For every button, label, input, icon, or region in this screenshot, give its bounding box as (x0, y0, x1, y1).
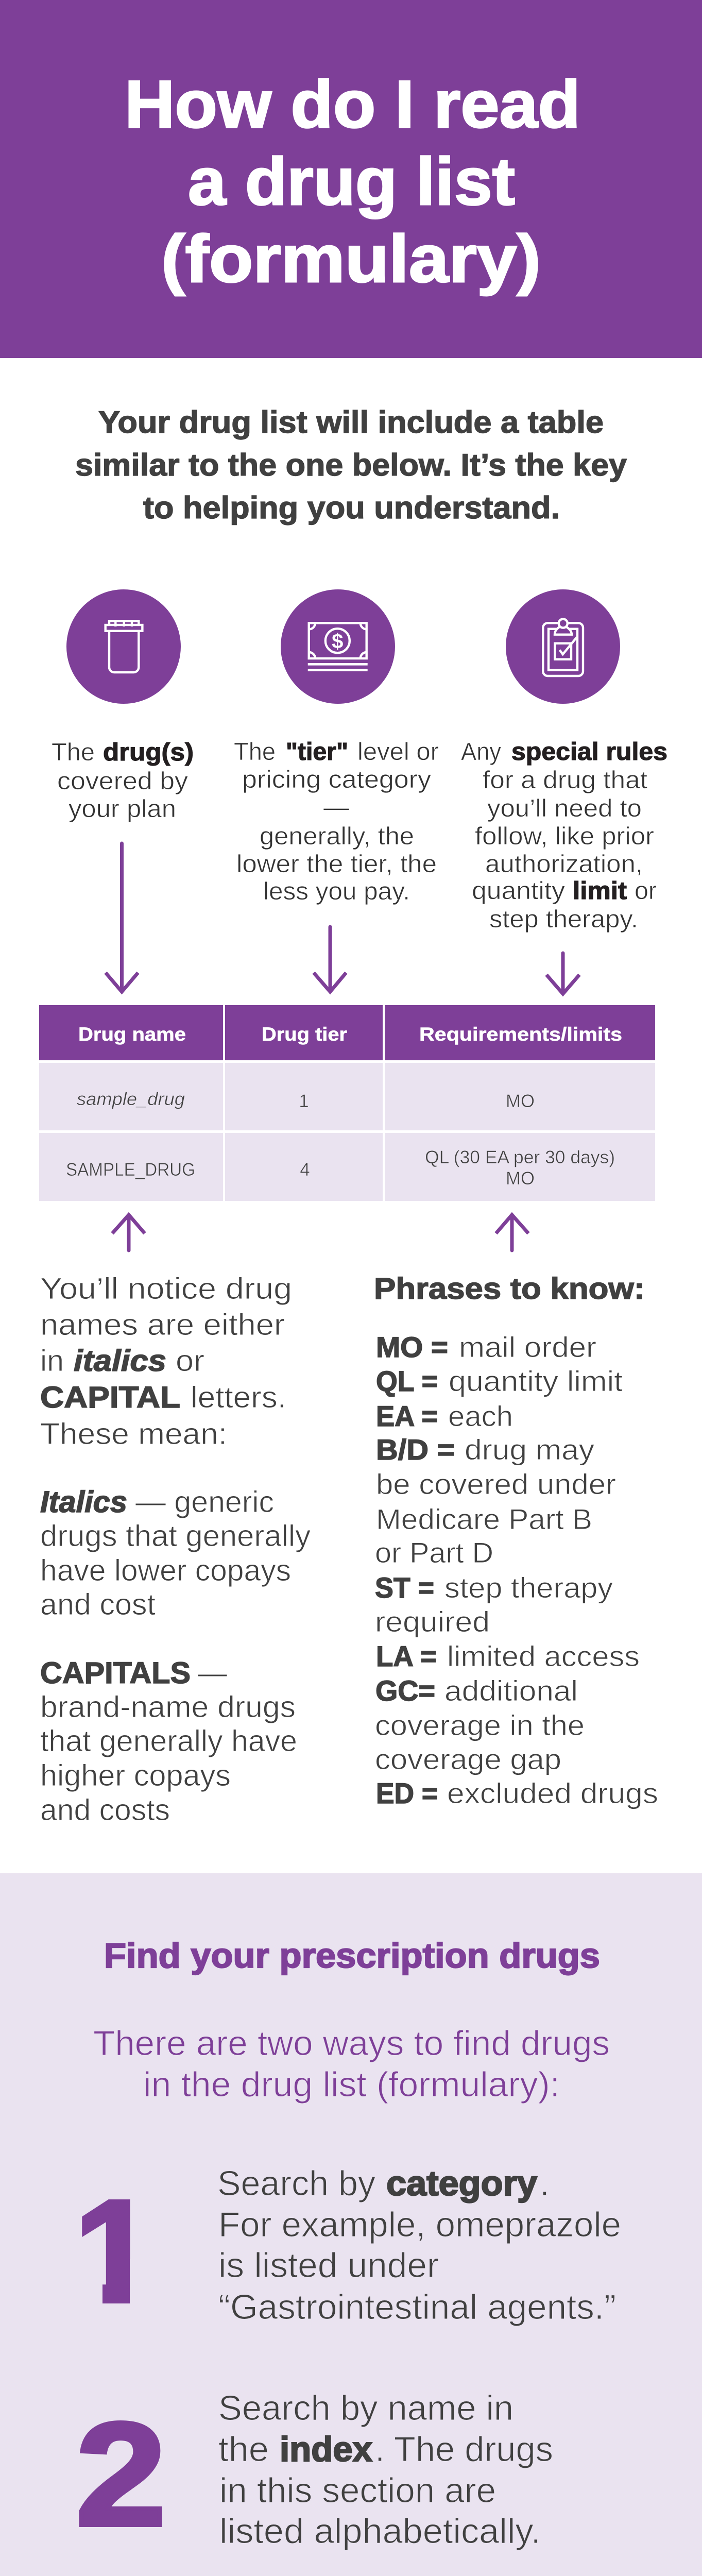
caption: special rules: limit (573, 877, 627, 905)
caption: tier level: "tier" (286, 738, 348, 766)
step 1 text: “Gastrointestinal agents.” (218, 2287, 616, 2327)
table row: brand sample: 4 (300, 1160, 310, 1180)
table header row (39, 1005, 655, 1060)
number 2: 2 (76, 2393, 166, 2556)
step 2 text: Search by name in (218, 2388, 513, 2428)
text block: phrases glossary: Medicare Part B (376, 1503, 592, 1535)
caption: special rules: step therapy. (489, 906, 638, 933)
text block: phrases glossary: drug may (465, 1433, 594, 1466)
table row: brand sample: MO (506, 1168, 535, 1189)
subheading: two ways (93, 2024, 610, 2104)
title: (formulary) (161, 221, 541, 296)
text block: phrases glossary: coverage in the (375, 1709, 585, 1741)
caption: special rules (461, 738, 667, 933)
intro text: to helping you understand. (143, 490, 560, 525)
text block: drug name styles: have lower copays (40, 1554, 291, 1587)
text block: phrases glossary: EA = (376, 1400, 438, 1432)
step 1 text: category (386, 2164, 537, 2203)
text block: phrases glossary: MO = (376, 1331, 448, 1363)
caption: tier level: generally, the (260, 823, 414, 850)
step 1 text: . (540, 2164, 550, 2203)
arrow: to requirements (546, 953, 579, 994)
icon: dollar bill: $ (332, 630, 343, 653)
text block: phrases glossary: ST = (375, 1571, 434, 1604)
text block: phrases glossary: coverage gap (375, 1743, 561, 1775)
text block: drug name styles: and costs (40, 1793, 170, 1827)
text block: drug name styles: that generally have (40, 1724, 297, 1758)
arrow: to drug name (106, 843, 138, 992)
text block: drug name styles: Italics (40, 1485, 127, 1519)
arrow: up to requirements (496, 1215, 528, 1250)
arrow: up to drug names (112, 1215, 145, 1250)
step 1 text: For example, omeprazole (218, 2205, 621, 2244)
text block: phrases glossary: required (375, 1605, 490, 1638)
text block: phrases glossary: LA = (376, 1640, 437, 1672)
number 1: 1 (74, 2170, 155, 2332)
step 2 text: listed alphabetically. (219, 2512, 541, 2551)
caption: special rules: you’ll need to (487, 795, 642, 822)
text block: phrases glossary: QL = (376, 1365, 438, 1397)
text block: drug name styles: brand-name drugs (40, 1690, 296, 1724)
step 2 text: . The drugs (375, 2430, 553, 2469)
table row: brand sample: SAMPLE_DRUG (66, 1160, 195, 1180)
text block: drug name styles: CAPITAL (40, 1381, 180, 1414)
text block: phrases glossary: quantity limit (449, 1365, 623, 1397)
intro text: similar to the one below. It’s the key (75, 448, 627, 482)
caption: drugs covered (52, 739, 194, 823)
table (39, 1005, 655, 1201)
step 2 text: index (280, 2430, 372, 2469)
text block: drug name styles: You’ll notice drug (40, 1272, 292, 1306)
table header row: Requirements/limits (419, 1024, 622, 1045)
text block: drug name styles: names are either (40, 1308, 285, 1342)
caption: special rules: for a drug that (483, 767, 647, 794)
text block: phrases glossary: step therapy (444, 1571, 613, 1604)
caption: drugs covered: The (52, 739, 95, 766)
table row: generic sample: MO (506, 1091, 535, 1111)
text block: phrases glossary: ED = (376, 1777, 438, 1809)
text block: drug name styles: in (40, 1344, 64, 1378)
table header row: Drug tier (262, 1024, 347, 1045)
title: How do I read (125, 66, 580, 142)
arrow: to drug tier (314, 927, 346, 992)
text block: drug name styles: — generic (135, 1485, 274, 1519)
text block: phrases glossary: mail order (459, 1331, 596, 1363)
table row: generic sample (39, 1063, 655, 1130)
intro text: Your drug list will include a table (98, 405, 604, 439)
text block: drug name styles: higher copays (40, 1759, 231, 1792)
text block: phrases glossary: excluded drugs (447, 1777, 658, 1809)
table row: brand sample (39, 1133, 655, 1201)
step 1 text (217, 2164, 621, 2327)
text block: drug name styles: or (176, 1344, 204, 1378)
text block: drug name styles: and cost (40, 1588, 156, 1621)
step 2 text (218, 2388, 553, 2551)
caption: tier level: pricing category (242, 766, 431, 793)
text block: phrases glossary: B/D = (376, 1433, 455, 1466)
text block: drug name styles: These mean: (40, 1417, 227, 1451)
step 2 text: the (218, 2430, 269, 2469)
table row: generic sample: sample_drug (77, 1089, 185, 1109)
panel: header banner (0, 0, 702, 358)
text block: phrases glossary: additional (444, 1674, 578, 1707)
heading: phrases to know: Phrases to know: (374, 1272, 645, 1306)
caption: tier level: level or (357, 738, 439, 766)
table row: brand sample: QL (30 EA per 30 days) (425, 1147, 615, 1167)
text block: phrases glossary: limited access (447, 1640, 640, 1672)
text block: drug name styles (40, 1272, 311, 1827)
title (125, 66, 580, 296)
text block: drug name styles: drugs that generally (40, 1519, 311, 1553)
caption: tier level (234, 738, 439, 905)
caption: special rules: follow, like prior (475, 823, 654, 850)
caption: special rules: authorization, (485, 851, 643, 878)
caption: special rules: special rules (511, 738, 667, 766)
caption: tier level: The (234, 738, 276, 766)
table header row: Drug name (78, 1024, 186, 1045)
text block: drug name styles: italics (74, 1344, 166, 1378)
caption: drugs covered: covered by (57, 768, 188, 795)
text block: phrases glossary (375, 1331, 658, 1809)
text block: phrases glossary: or Part D (375, 1536, 493, 1569)
text block: phrases glossary: be covered under (376, 1468, 616, 1500)
caption: drugs covered: drug(s) (103, 739, 194, 766)
title: a drug list (188, 144, 515, 219)
caption: special rules: or (635, 877, 657, 905)
heading: find your prescription drugs: Find your prescription drugs (104, 1936, 600, 1975)
text block: phrases glossary: each (448, 1400, 513, 1432)
caption: special rules: Any (461, 738, 501, 766)
text block: drug name styles: CAPITALS (40, 1656, 191, 1690)
caption: special rules: quantity (472, 877, 565, 905)
step 1 text: Search by (217, 2164, 375, 2203)
icon: pill bottle (66, 589, 181, 704)
step 1 text: is listed under (218, 2246, 439, 2285)
icon: dollar bill (281, 589, 395, 704)
table row: generic sample: 1 (299, 1091, 309, 1111)
text block: drug name styles: — (198, 1656, 227, 1690)
text block: drug name styles: letters. (191, 1381, 286, 1414)
subheading: two ways: There are two ways to find drugs (93, 2024, 610, 2063)
panel: find your prescription drugs (0, 1873, 702, 2576)
caption: tier level: less you pay. (263, 878, 410, 905)
intro text (75, 405, 627, 525)
text block: phrases glossary: GC= (375, 1674, 435, 1707)
caption: tier level: lower the tier, the (236, 851, 437, 878)
caption: drugs covered: your plan (69, 795, 176, 823)
caption: tier level: — (323, 794, 349, 821)
step 2 text: in this section are (219, 2471, 496, 2510)
subheading: two ways: in the drug list (formulary): (143, 2065, 560, 2104)
icon: clipboard with checkbox (506, 589, 620, 704)
